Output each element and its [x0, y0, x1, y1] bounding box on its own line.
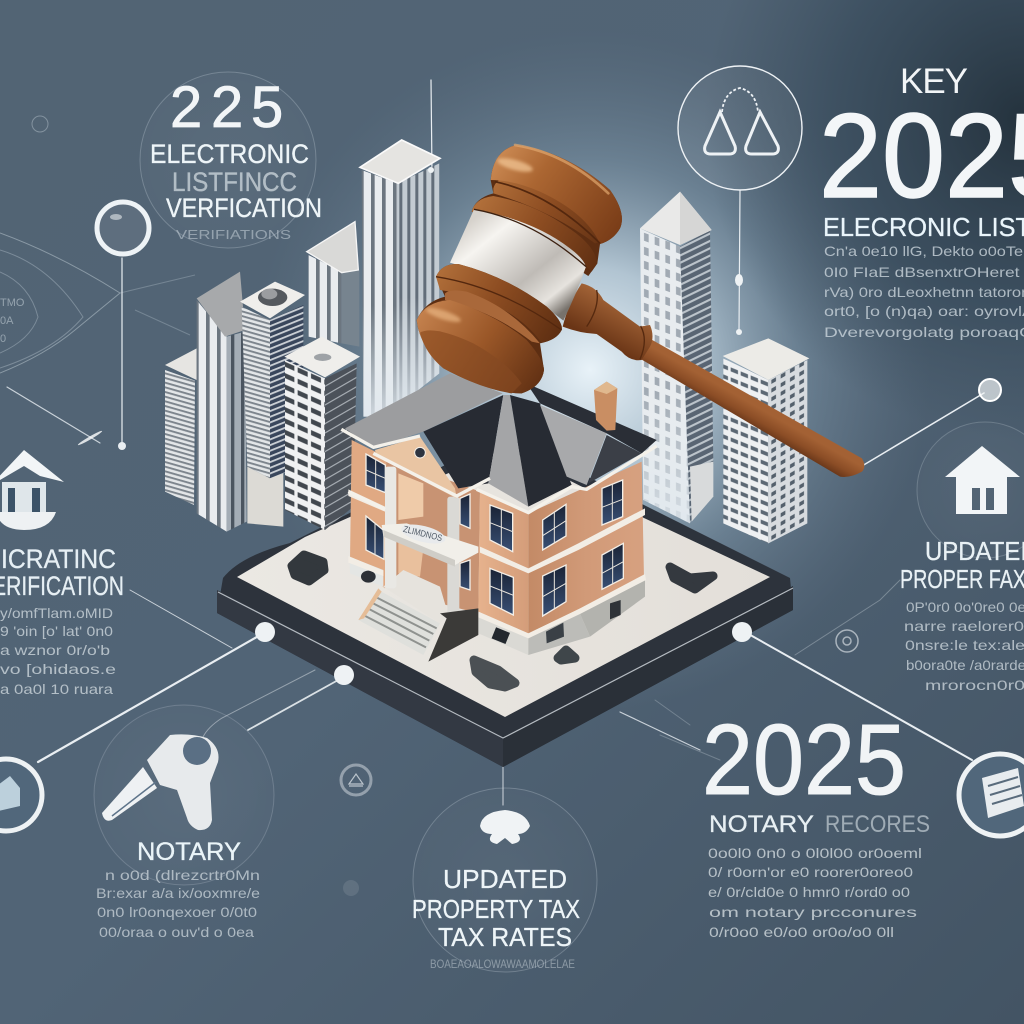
- house: [341, 373, 657, 662]
- heading: key: KEY: [900, 62, 968, 101]
- building: spire tower: [640, 192, 713, 523]
- icon: house left: [0, 450, 64, 530]
- building: front dark tower: [284, 337, 360, 530]
- body text: y/omfTlam.oMID: [0, 605, 113, 621]
- body text: 00/oraa o ouv'd o 0ea: [99, 924, 254, 940]
- network diagram left: TMO: [0, 297, 25, 309]
- heading: 2025: 2025: [702, 704, 906, 816]
- body text: 0P'0r0 0o'0re0 0e: [906, 599, 1024, 615]
- icon: house right: [945, 446, 1020, 514]
- icon: left document ring: [0, 759, 42, 831]
- network diagram left: 0: [0, 333, 6, 345]
- body text: 0/r0o0 e0/o0 or0o/o0 0ll: [709, 924, 894, 940]
- building: far left low: [165, 348, 197, 505]
- subheading: notary records: NOTARY: [709, 811, 814, 838]
- icon: lens pin: [97, 202, 149, 450]
- body text: rVa) 0ro dLeoxhetnn tatoronl: [824, 284, 1024, 300]
- heading: updated property tax rates: UPDATED: [443, 864, 567, 894]
- network diagram left: 0A: [0, 315, 14, 327]
- body text: 0nsre:le tex:ale: [905, 637, 1024, 653]
- body text: Dverevorgolatg poroaqG: [824, 324, 1024, 340]
- icon: key: [102, 734, 219, 830]
- body text: n o0d (dlrezcrtr0Mn: [105, 867, 260, 883]
- panel: right updated property tax: [900, 422, 1024, 693]
- body text: 0n0 lr0onqexoer 0/0t0: [97, 904, 257, 920]
- roof trim and gable: [341, 429, 657, 513]
- body text: 0/ r0orn'or e0 roorer0oreo0: [708, 864, 913, 880]
- body text: om notary prcconures: [709, 904, 917, 920]
- subheading: notary records: [709, 811, 930, 838]
- building: mid back: [307, 222, 359, 347]
- panel: top-left electronic listing verification: [140, 72, 322, 248]
- portico: balcony and columns: [382, 467, 478, 662]
- small caption: BOAEAOALOWAWAAMOLELAE: [430, 957, 575, 971]
- heading: verification: [0, 544, 124, 601]
- heading: updated property tax rates: TAX RATES: [438, 922, 572, 952]
- body text: 0I0 FIaE dBsenxtrOHeret 0: [824, 264, 1024, 280]
- icon: right document ring: [959, 754, 1024, 836]
- connector dots and ring icons: [0, 167, 1024, 836]
- foundation: [349, 557, 645, 655]
- body text: Cn'a 0e10 llG, Dekto o0oTeS: [824, 243, 1024, 259]
- platform base: [217, 435, 793, 767]
- body text: e/ 0r/cld0e 0 hmr0 r/ord0 o0: [708, 884, 910, 900]
- heading: electronic listing verification: LISTFINCC: [172, 167, 297, 197]
- heading: updated property tax rates: [412, 864, 580, 952]
- heading: electronic listing verification: ELECTRONIC: [150, 139, 309, 169]
- windows: [366, 454, 623, 616]
- icon: small pin circle: [341, 765, 371, 896]
- buildings left: [165, 140, 440, 532]
- building: striped tower: [197, 272, 247, 532]
- heading: electronic listing verification: [150, 139, 322, 223]
- heading: updated property tax rates: PROPERTY TAX: [412, 894, 580, 924]
- body text: [824, 243, 1024, 340]
- gavel lower head and face: [417, 264, 562, 393]
- gavel: [417, 145, 864, 477]
- platform objects: [292, 555, 713, 687]
- heading: notary: NOTARY: [137, 838, 241, 866]
- body text: b0ora0te /a0rarde: [906, 657, 1024, 673]
- portico: balcony and columns: ZLIMDNOS: [402, 524, 443, 543]
- house walls: [350, 440, 644, 633]
- panel: 2025 notary records: [702, 704, 930, 940]
- body text: narre raelorer0: [904, 618, 1024, 634]
- heading: updated property tax: [900, 536, 1024, 594]
- icon: tax badge: [480, 810, 530, 844]
- building: front right tower: [723, 338, 809, 543]
- buildings right: [640, 192, 809, 543]
- body text: [708, 845, 922, 940]
- floor bands: [348, 489, 646, 638]
- subheading: notary records: RECORES: [825, 811, 930, 838]
- connector lines: [7, 80, 984, 805]
- body text: ort0, [o (n)qa) oar: oyrovlA: [824, 303, 1024, 319]
- gavel handle: [563, 283, 864, 477]
- house roof: [345, 373, 657, 507]
- icon: small ring: [836, 630, 858, 652]
- panel: left verification: [0, 450, 124, 697]
- small caption: VERIFIATIONS: [176, 227, 291, 242]
- gavel upper head: [472, 145, 622, 276]
- panel: key 2025 electronic listing: [819, 62, 1024, 340]
- heading: verification: ICRATINC: [1, 544, 116, 574]
- icon: handcuffs in circle: [678, 66, 802, 190]
- heading: 225: 225: [170, 75, 283, 140]
- network diagram left: [0, 116, 195, 446]
- body text: mrorocn0r0: [925, 677, 1024, 693]
- building: far tall: [360, 140, 440, 417]
- panel: notary: [94, 705, 274, 940]
- stairs: [358, 588, 440, 655]
- body text: a 0a0l 10 ruara: [0, 681, 113, 697]
- body text: [904, 599, 1024, 693]
- window mullions: [366, 459, 623, 609]
- body text: a wznor 0r/o'b: [0, 642, 110, 658]
- portico floor: [383, 570, 448, 623]
- body text: [96, 867, 260, 940]
- platform surface: [237, 448, 770, 717]
- heading: electronic listing verification: VERFICATION: [166, 193, 322, 223]
- building: grid tower: [240, 282, 305, 527]
- body text: [0, 605, 116, 697]
- body text: Br:exar a/a ix/ooxmre/e: [96, 885, 260, 901]
- body text: vo [ohidaos.e: [0, 661, 116, 677]
- gavel silver band: [450, 209, 586, 321]
- body text: 0o0l0 0n0 o 0l0l00 or0oeml: [708, 845, 922, 861]
- panel: updated property tax rates: [412, 788, 597, 972]
- body text: 9 'oin [o' lat' 0n0: [0, 623, 113, 639]
